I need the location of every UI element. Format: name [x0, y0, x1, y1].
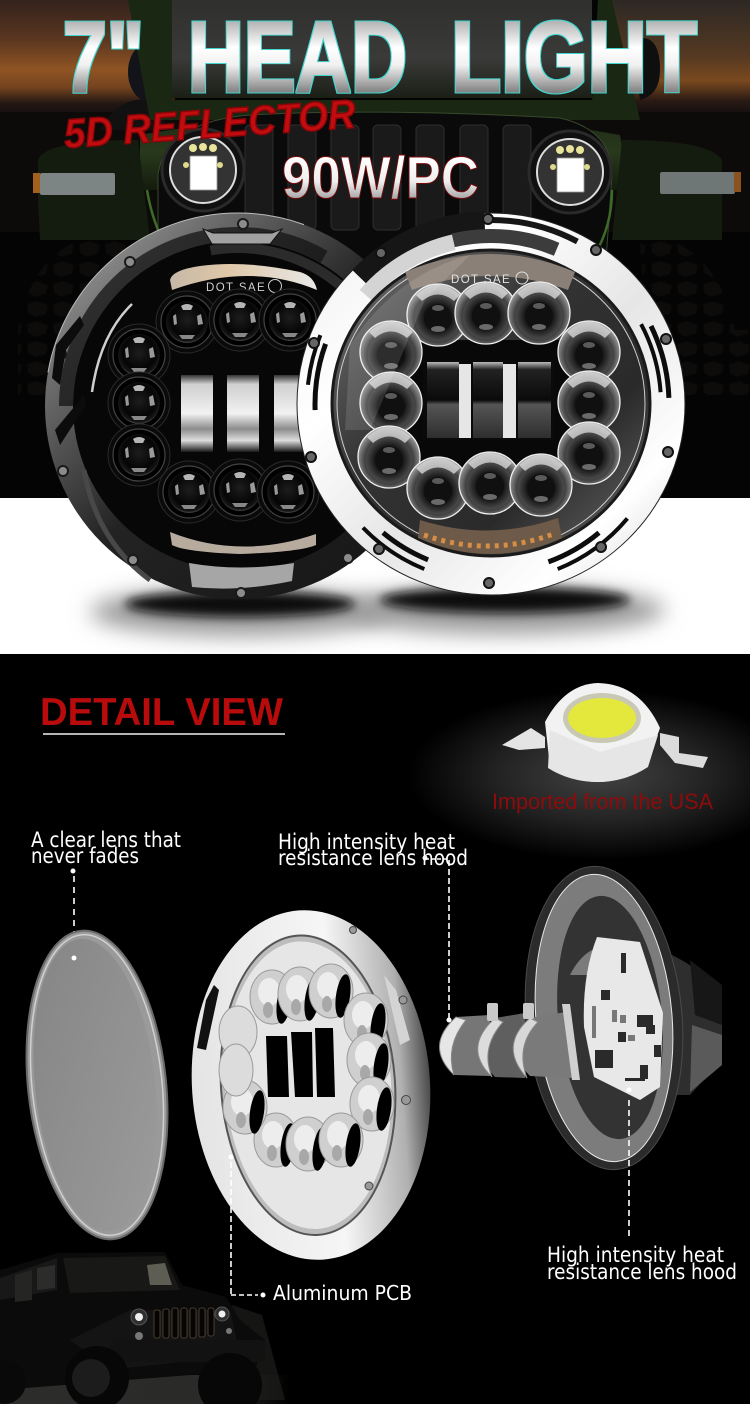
title: 7" [63, 2, 144, 114]
daytime strips [170, 264, 317, 290]
label: clear lens [31, 828, 181, 868]
power label: 90W/PC [282, 145, 479, 211]
part: rear housing [513, 860, 722, 1176]
label: lens hood bottom [547, 1243, 737, 1284]
part: clear lens disc [12, 924, 182, 1246]
side vents [52, 316, 84, 385]
heatsink [670, 955, 722, 1095]
center bars [176, 372, 306, 456]
heading: detail view: DETAIL VIEW [40, 691, 283, 734]
green pillars [147, 190, 190, 285]
lens cluster [407, 284, 469, 346]
grille slots [245, 125, 531, 230]
title: HEAD [188, 2, 407, 114]
grille [154, 1308, 214, 1338]
reflector lenses [250, 970, 294, 1025]
background: black detail panel [0, 654, 750, 1404]
part: chrome reflector [180, 902, 442, 1268]
wheels [65, 1346, 129, 1404]
headlights [131, 1309, 147, 1325]
label: lens hood top [278, 830, 468, 870]
headlight: chrome housing [297, 213, 685, 595]
tire tread [18, 240, 130, 395]
top badge [203, 229, 282, 244]
amber LEDs [424, 533, 556, 546]
leader: PCB bottom [626, 1088, 632, 1238]
DOT label: DOT SAE [206, 282, 266, 294]
leader dot on hood [446, 1018, 452, 1022]
leader: aluminum PCB [228, 1154, 266, 1298]
turn signals [40, 173, 115, 195]
grille panel [158, 112, 612, 260]
label: clear lens: A clear lens that [31, 828, 181, 852]
leader: lens hood top [422, 856, 449, 1018]
background: lower white panel with shadow [0, 498, 750, 654]
center cutouts [266, 1036, 289, 1097]
center bars [423, 360, 555, 440]
part: lens hoods [439, 1003, 580, 1080]
mirror [128, 42, 172, 102]
PCB components [595, 953, 661, 1081]
windshield frame [128, 0, 640, 120]
screws [306, 214, 673, 588]
jeep headlights [162, 129, 244, 211]
leader dot on lens [72, 956, 76, 960]
label: aluminum PCB: Aluminum PCB [273, 1281, 412, 1305]
title [63, 2, 697, 114]
glass gloss arc [92, 304, 132, 392]
label: lens hood top: resistance lens hood [278, 846, 468, 870]
screws [350, 926, 410, 1190]
PCB [584, 937, 663, 1100]
bezel segments [307, 220, 675, 588]
leader: clear lens [70, 868, 76, 960]
screws [56, 219, 353, 598]
label: clear lens: never fades [31, 844, 139, 868]
top glare [345, 255, 470, 430]
label: lens hood top: High intensity heat [278, 830, 455, 854]
lens cluster [156, 291, 218, 353]
bottom badge [189, 563, 294, 589]
hood [140, 114, 630, 190]
label: lens hood bottom: High intensity heat [547, 1243, 724, 1267]
title: LIGHT [451, 2, 697, 114]
caption: Imported from the USA [492, 789, 713, 814]
background: upper dark panel [0, 0, 750, 498]
photo: jeep front with sunset [0, 0, 750, 395]
top lettering strip [405, 254, 575, 290]
dark center field [405, 340, 575, 470]
headlight: black housing [45, 213, 431, 599]
DOT label: DOT SAE [451, 274, 511, 286]
subtitle: 5D reflector: 5D REFLECTOR [62, 91, 357, 157]
icon: LED chip with glow [408, 683, 750, 860]
photo: black jeep [0, 1252, 290, 1404]
